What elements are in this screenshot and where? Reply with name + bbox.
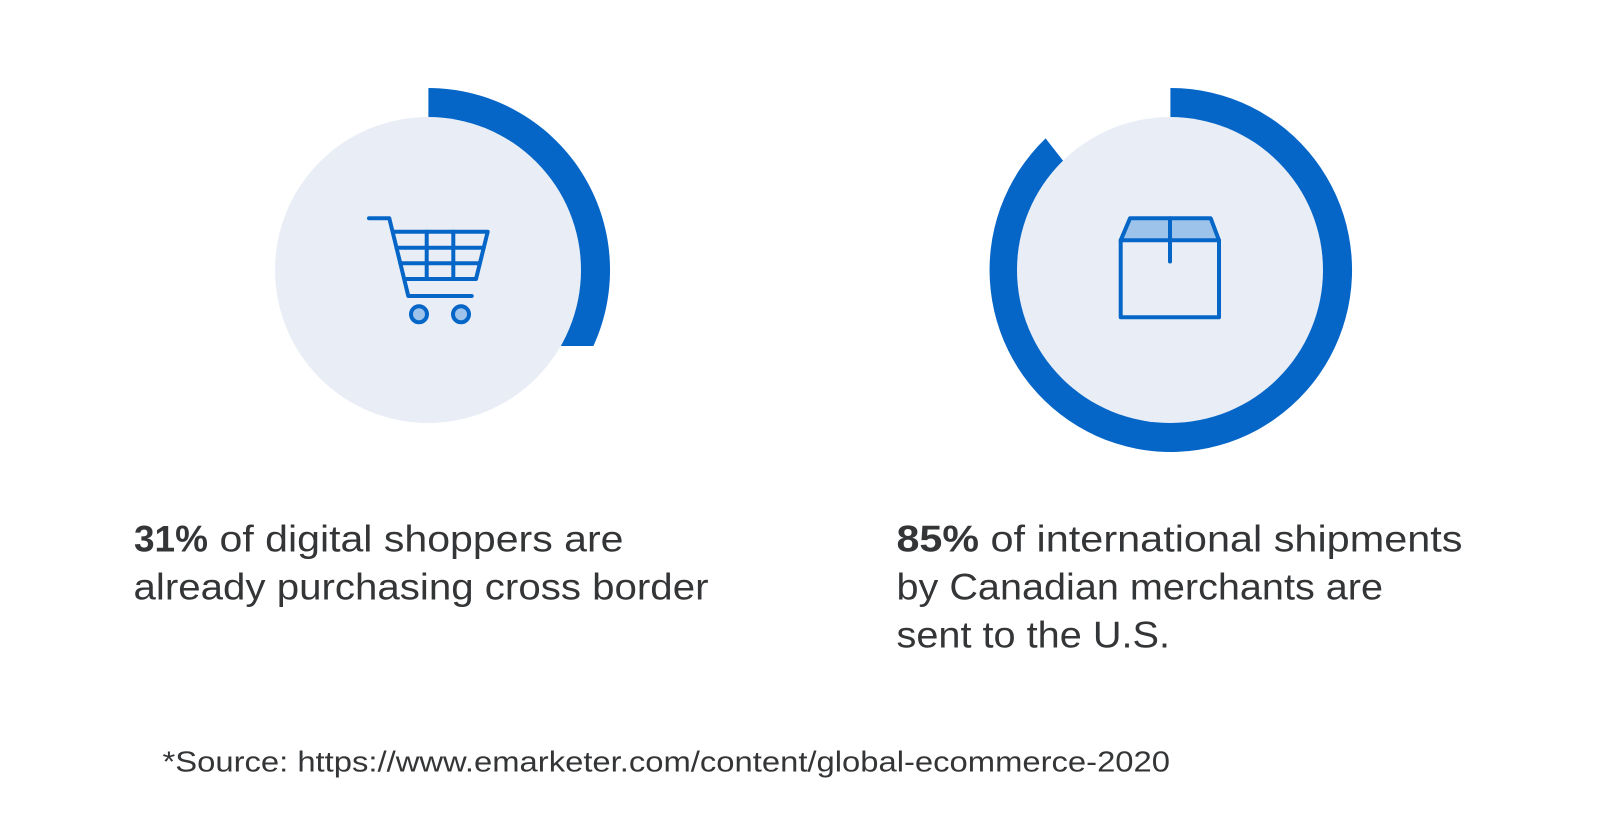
text block: 31% statistic — [134, 519, 708, 608]
source note: *Source: https://www.emarketer.com/content/global-ecommerce-2020 — [162, 747, 1170, 779]
panel: 31% donut with cart icon — [275, 88, 610, 423]
progress arc: 85% — [990, 88, 1352, 452]
light circle background — [275, 117, 581, 423]
text block: 85% statistic: of international shipments — [990, 519, 1462, 560]
icon: parcel box — [1121, 218, 1219, 317]
text block: 85% statistic — [896, 519, 1462, 655]
text block: 85% statistic: by Canadian merchants are — [896, 566, 1383, 608]
progress arc: 31% — [428, 88, 610, 346]
text block: 31% statistic: already purchasing cross border — [134, 566, 708, 608]
text block: 31% statistic: of digital shoppers are — [220, 519, 624, 560]
icon: shopping cart — [369, 218, 488, 322]
light circle background — [1017, 117, 1323, 423]
text block: 31% statistic: 31% — [134, 519, 208, 560]
text block: 85% statistic: 85% — [896, 519, 979, 560]
text block: 85% statistic: sent to the U.S. — [896, 614, 1170, 655]
panel: 85% donut with box icon — [990, 88, 1352, 452]
